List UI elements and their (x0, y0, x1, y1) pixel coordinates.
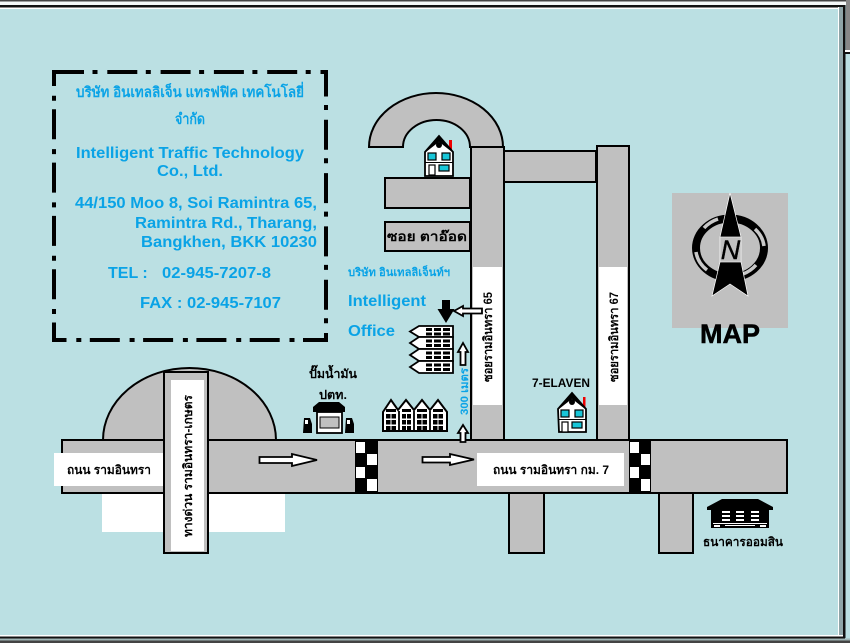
road stubs (509, 490, 693, 553)
label: Intelligent: Intelligent (348, 293, 427, 310)
arrow: white left arrow (454, 306, 482, 316)
expressway road (164, 372, 208, 553)
connector road (504, 151, 596, 182)
label: bank: ธนาคารออมสิน (703, 535, 784, 549)
road: soi 67: ซอยรามอินทรา 67 (607, 292, 621, 382)
fax: FAX : 02-945-7107 (140, 295, 281, 312)
road: soi 67 (597, 146, 629, 440)
icon: bank (707, 499, 773, 528)
label: gas station: ปตท. (319, 388, 347, 402)
company name in English: Intelligent Traffic Technology (76, 145, 304, 162)
title: MAP: MAP (700, 319, 760, 349)
company suffix in Thai: จำกัด (175, 111, 205, 128)
label: Ramintra km 7: ถนน รามอินทรา กม. 7 (493, 463, 609, 477)
panel: compass (672, 193, 788, 328)
company name in Thai: บริษัท อินเทลลิเจ็น แทรฟฟิค เทคโนโลยี่ (76, 81, 304, 101)
icon: office building (410, 326, 453, 373)
north N: N (721, 235, 741, 265)
ring highlights (696, 219, 764, 274)
address line 1: 44/150 Moo 8, Soi Ramintra 65, (75, 195, 317, 212)
label: Ramintra km 7 (477, 453, 624, 486)
arrow: up arrow upper (458, 343, 468, 365)
icon: gas station (303, 402, 354, 433)
checkered crossing 2 (629, 440, 651, 493)
soi sign (385, 222, 470, 251)
side road (385, 178, 470, 208)
main road (62, 440, 787, 493)
compass ring (696, 218, 764, 278)
label: Ramintra road (54, 453, 163, 486)
label: Ramintra road: ถนน รามอินทรา (67, 463, 151, 477)
icon: townhouses (383, 400, 447, 431)
address line 3: Bangkhen, BKK 10230 (141, 234, 317, 251)
label: gas station (309, 364, 358, 402)
label: 300 metres: 300 เมตร (459, 368, 471, 415)
arrow: road direction 1 (260, 454, 317, 466)
dome road (103, 368, 276, 440)
curved road (369, 93, 503, 147)
icon: 7-Eleven house (558, 393, 586, 432)
label: gas station: ปั๊มน้ำมัน (309, 364, 358, 381)
label: company small Thai: บริษัท อินเทลลิเจ็นท์ฯ (348, 265, 450, 279)
label: 7-Eleven: 7-ELAVEN (532, 378, 590, 390)
arrow: black down arrow (438, 300, 454, 323)
telephone: TEL : (108, 265, 148, 282)
white block under road (102, 492, 285, 532)
road: soi 65: ซอยรามอินทรา 65 (481, 292, 495, 382)
arrow: up arrow lower (458, 425, 468, 442)
expressway road: ทางด่วน รามอินทรา-เกษตร (181, 394, 195, 537)
label: Office: Office (348, 323, 395, 340)
telephone number: 02-945-7207-8 (162, 265, 271, 282)
compass needle (712, 193, 748, 296)
address line 2: Ramintra Rd., Tharang, (135, 215, 317, 232)
road: soi 65 (471, 147, 504, 440)
arrow: road direction 2 (422, 454, 474, 465)
panel: company address box (54, 72, 326, 340)
soi sign: ซอย ตาอ๊อด (387, 229, 467, 244)
checkered crossing 1 (355, 440, 378, 493)
company suffix: Co., Ltd. (157, 163, 223, 180)
icon: house (425, 136, 453, 176)
